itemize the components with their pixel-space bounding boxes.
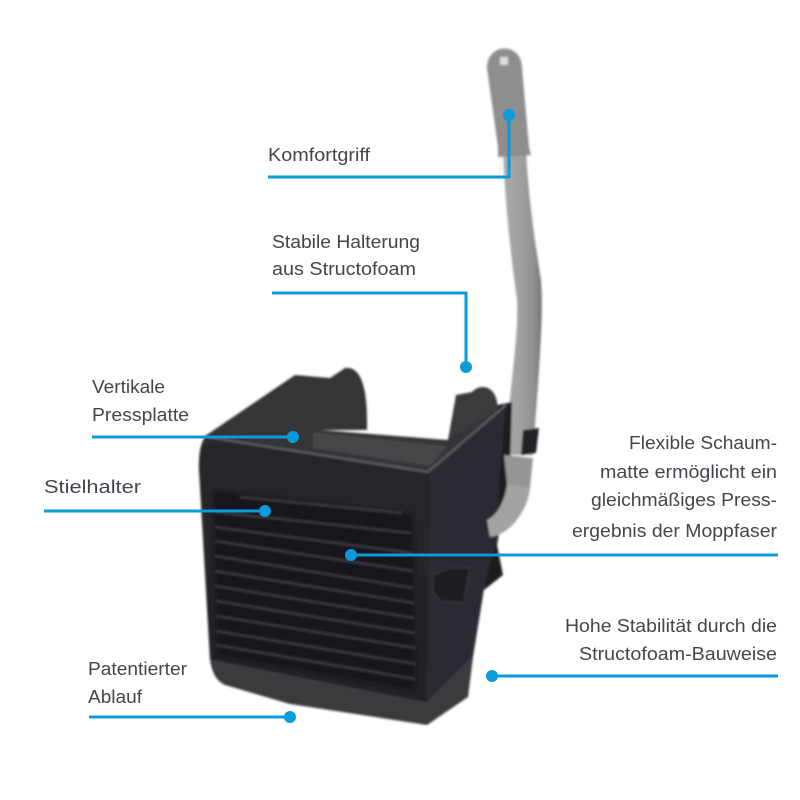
callout: Patentierter Ablauf: Patentierter: [88, 658, 187, 679]
callout: Vertikale Pressplatte: Vertikale: [92, 376, 165, 397]
callout: Flexible Schaummatte: [345, 432, 778, 561]
base tray: [210, 657, 473, 725]
side knob: [433, 568, 470, 603]
elbow joint: [487, 484, 530, 537]
rear right bracket: [448, 387, 505, 440]
callout: Stielhalter: Stielhalter: [44, 476, 141, 497]
callout: Flexible Schaummatte: ergebnis der Moppfaser: [572, 520, 777, 541]
callout: Patentierter Ablauf: Ablauf: [88, 686, 143, 707]
callout: Flexible Schaummatte: matte ermöglicht ein: [600, 461, 777, 482]
callout: Hohe Stabilität: [486, 615, 778, 682]
callout: Flexible Schaummatte: gleichmäßiges Press-: [591, 489, 777, 510]
product: mop press: [199, 48, 542, 725]
handle collar: [504, 455, 533, 488]
front wall: [199, 434, 430, 703]
callout: Stabile Halterung: aus Structofoam: [272, 258, 416, 279]
callout: Vertikale Pressplatte: Pressplatte: [92, 404, 189, 425]
handle clip: [521, 428, 539, 455]
callout: Stabile Halterung: Stabile Halterung: [272, 231, 420, 252]
rear left bracket: [290, 368, 367, 430]
press plate interior: [205, 375, 505, 472]
grip end cap: [500, 57, 508, 65]
callout: Komfortgriff: [268, 109, 515, 177]
callout: Vertikale Pressplatte: [92, 376, 299, 443]
callout: Stielhalter: [44, 476, 271, 517]
hinge and mechanism: [484, 402, 512, 590]
handle shaft: [503, 150, 542, 455]
side wall: [427, 405, 506, 703]
callout: Patentierter Ablauf: [88, 658, 296, 723]
front grille recess: [213, 490, 415, 690]
vertical press plate: [313, 432, 447, 466]
handle grip: [487, 48, 531, 157]
top edge highlights: [208, 405, 506, 472]
callout: Hohe Stabilität: Structofoam-Bauweise: [579, 643, 777, 664]
front slats: [215, 497, 416, 679]
callout: Komfortgriff: Komfortgriff: [268, 144, 371, 165]
callout: Stabile Halterung: [272, 231, 472, 373]
callout: Hohe Stabilität: Hohe Stabilität durch die: [565, 615, 777, 636]
callout: Flexible Schaummatte: Flexible Schaum-: [629, 432, 777, 453]
